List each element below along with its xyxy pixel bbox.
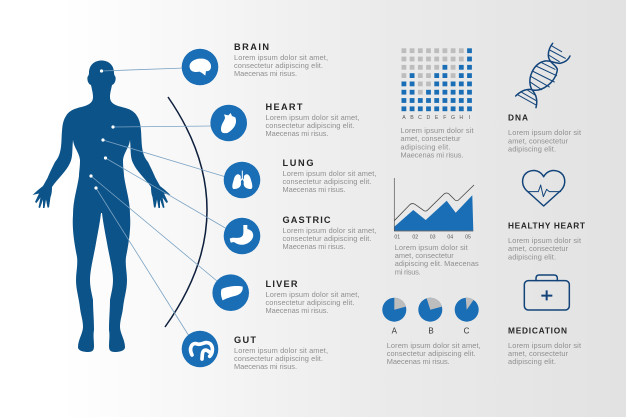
text: heart: Maecenas mi risus. — [266, 129, 328, 138]
text: gastric: Maecenas mi risus. — [282, 242, 346, 251]
item: lung — [224, 158, 376, 198]
heading: gastric: GASTRIC — [282, 215, 331, 225]
text: medication: amet, consectetur — [508, 349, 569, 358]
text: gut: Maecenas mi risus. — [234, 362, 297, 371]
text: dot matrix: amet, consectetur — [400, 134, 461, 143]
heading: healthy heart: HEALTHY HEART — [508, 220, 585, 230]
icon: heart organ — [210, 105, 247, 141]
text: healthy heart — [508, 236, 581, 262]
text: gastric — [282, 226, 376, 251]
pie labels: C — [464, 326, 470, 336]
pie C — [455, 298, 479, 322]
organ marker dots — [89, 69, 115, 190]
item: gastric — [224, 215, 376, 254]
icon: medical case — [524, 275, 569, 310]
pie B — [418, 298, 442, 322]
text: area chart: adipiscing elit. Maecenas — [395, 259, 479, 268]
heading: lung: LUNG — [282, 158, 314, 168]
text: healthy heart: adipiscing elit. — [508, 252, 556, 262]
text: area chart — [395, 243, 479, 276]
item: liver — [212, 274, 360, 315]
axis labels — [394, 234, 471, 240]
column labels: G — [451, 115, 455, 121]
text: medication — [508, 341, 581, 366]
text: brain: Maecenas mi risus. — [234, 69, 297, 78]
human body silhouette — [32, 60, 170, 352]
text: gut: Lorem ipsum dolor sit amet, — [234, 346, 328, 355]
text: DNA — [508, 128, 581, 154]
text: area chart: amet, consectetur — [395, 251, 454, 260]
text: liver: Maecenas mi risus. — [266, 306, 328, 315]
text: dot matrix: Maecenas mi risus. — [400, 150, 464, 160]
text: DNA: Lorem ipsum dolor sit — [508, 128, 581, 137]
text: pie charts: consectetur adipiscing elit. — [387, 349, 476, 358]
icon: lungs — [224, 162, 260, 198]
text: gastric: consectetur adipiscing elit. — [282, 234, 372, 243]
text: lung — [282, 169, 376, 194]
icon: intestine — [182, 331, 218, 367]
column labels — [402, 115, 470, 121]
pie labels — [392, 326, 470, 336]
column labels: H — [459, 115, 463, 121]
icon: DNA helix — [516, 43, 570, 108]
text: healthy heart: amet, consectetur — [508, 244, 569, 253]
text: gut: consectetur adipiscing elit. — [234, 354, 323, 363]
column labels: I — [469, 115, 470, 121]
axis labels: 01 — [394, 234, 400, 240]
text: pie charts: Maecenas mi risus. — [387, 357, 450, 366]
text: dot matrix: Lorem ipsum dolor sit — [400, 126, 474, 135]
trend line — [394, 185, 474, 221]
grey squares — [402, 48, 464, 95]
text: brain — [234, 53, 328, 78]
chart: square dot matrix — [402, 48, 472, 121]
blue squares — [402, 48, 472, 111]
text: liver — [266, 290, 360, 315]
connector lines — [91, 68, 227, 336]
heading: medication: MEDICATION — [508, 326, 567, 336]
heading: brain: BRAIN — [234, 42, 269, 52]
text: gastric: Lorem ipsum dolor sit amet, — [282, 226, 376, 235]
axis labels: 02 — [412, 234, 418, 240]
text: heart — [266, 113, 360, 138]
icon: brain — [182, 49, 218, 85]
text: dot matrix — [400, 126, 474, 160]
column labels: F — [443, 115, 446, 121]
text: pie charts — [387, 341, 481, 366]
text: lung: consectetur adipiscing elit. — [282, 177, 372, 186]
column labels: E — [435, 115, 439, 121]
text: heart: consectetur adipiscing elit. — [266, 121, 354, 130]
text: dot matrix: adipiscing elit. — [400, 142, 450, 152]
heading: heart: HEART — [266, 102, 303, 112]
text: DNA: amet, consectetur — [508, 136, 569, 146]
heading: liver: LIVER — [266, 279, 298, 289]
axes — [394, 178, 473, 231]
curved arc — [165, 97, 207, 327]
text: area chart: Lorem ipsum dolor sit — [395, 243, 468, 252]
pie labels: B — [428, 326, 434, 336]
text: lung: Maecenas mi risus. — [282, 185, 346, 194]
heading: gut: GUT — [234, 335, 256, 345]
pie labels: A — [392, 326, 398, 336]
item: brain — [182, 42, 328, 85]
column labels: A — [402, 115, 406, 121]
icon: liver — [212, 274, 249, 311]
chart: pie charts — [382, 298, 479, 336]
text: liver: Lorem ipsum dolor sit amet, — [266, 290, 360, 299]
pie A — [382, 298, 406, 322]
text: medication: Lorem ipsum dolor sit — [508, 341, 581, 350]
icon: stomach — [224, 218, 260, 254]
blue area — [394, 195, 473, 231]
text: DNA: adipiscing elit. — [508, 144, 556, 154]
heading: DNA: DNA — [508, 112, 528, 122]
icon: healthy heart — [523, 170, 565, 206]
item: heart — [210, 102, 360, 141]
text: brain: consectetur adipiscing elit. — [234, 61, 323, 70]
text: area chart: mi risus. — [395, 268, 421, 276]
item: gut — [182, 331, 328, 371]
axis labels: 05 — [465, 234, 471, 240]
text: brain: Lorem ipsum dolor sit amet, — [234, 53, 328, 62]
text: heart: Lorem ipsum dolor sit amet, — [266, 113, 360, 122]
text: medication: adipiscing elit. — [508, 357, 556, 366]
axis labels: 03 — [430, 234, 436, 240]
chart: area chart — [394, 178, 474, 240]
text: liver: consectetur adipiscing elit. — [266, 298, 354, 307]
text: healthy heart: Lorem ipsum dolor sit — [508, 236, 581, 245]
column labels: C — [418, 115, 422, 121]
text: pie charts: Lorem ipsum dolor sit amet, — [387, 341, 481, 350]
text: gut — [234, 346, 328, 371]
axis labels: 04 — [447, 234, 453, 240]
text: lung: Lorem ipsum dolor sit amet, — [282, 169, 376, 178]
column labels: D — [427, 115, 431, 121]
column labels: B — [410, 115, 414, 121]
